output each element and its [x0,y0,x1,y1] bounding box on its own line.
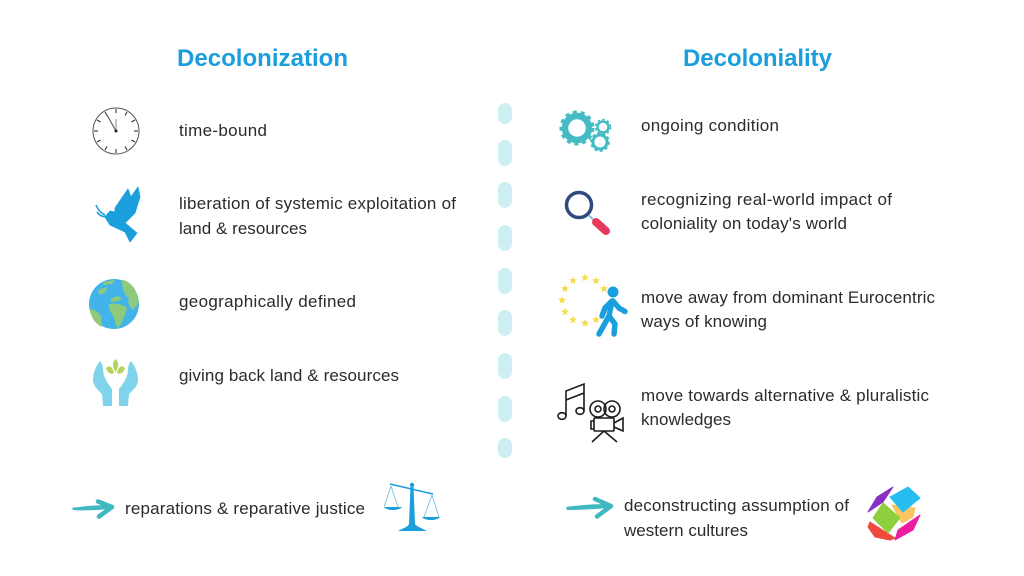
heading: Decoloniality: Decoloniality [683,45,833,72]
icon: music notes and film camera [558,384,623,442]
text: move towards: move towards alternative & pluralistic [641,386,930,405]
text: move towards [641,386,930,429]
heading: Decolonization: Decolonization [177,45,348,72]
text: deconstructing [623,496,849,540]
icon: globe [89,279,139,329]
dashed centre divider [498,103,512,458]
arrow: deconstructing [566,499,611,516]
icon: gears [561,112,610,151]
icon: EU stars and walking person [558,274,625,334]
text: move away: move away from dominant Eurocentric [641,288,936,307]
text: liberation: land & resources [179,219,307,238]
text: liberation [179,194,456,238]
text: deconstructing: western cultures [623,521,748,540]
text: geographically defined: geographically defined [179,292,356,311]
text: deconstructing: deconstructing assumption of [624,496,849,515]
text: recognizing [641,190,892,233]
text: time-bound: time-bound [179,121,267,140]
text: liberation: liberation of systemic exploitation of [179,194,456,213]
text: move towards: knowledges [641,410,731,429]
icon: magnifying glass [566,192,606,231]
icon: scales of justice [384,483,440,531]
icon: dove [96,187,140,242]
icon: clock [93,108,139,154]
text: move away [640,288,936,331]
icon: colourful abstract shapes [868,487,920,540]
text: recognizing: recognizing real-world impact of [641,190,892,209]
text: reparations: reparations & reparative justice [125,499,365,518]
text: recognizing: coloniality on today's world [641,214,847,233]
arrow: reparations [72,502,112,516]
icon: hands with leaves [93,359,138,406]
text: giving back: giving back land & resources [179,366,399,385]
text: move away: ways of knowing [640,312,767,331]
text: ongoing condition: ongoing condition [641,116,779,135]
